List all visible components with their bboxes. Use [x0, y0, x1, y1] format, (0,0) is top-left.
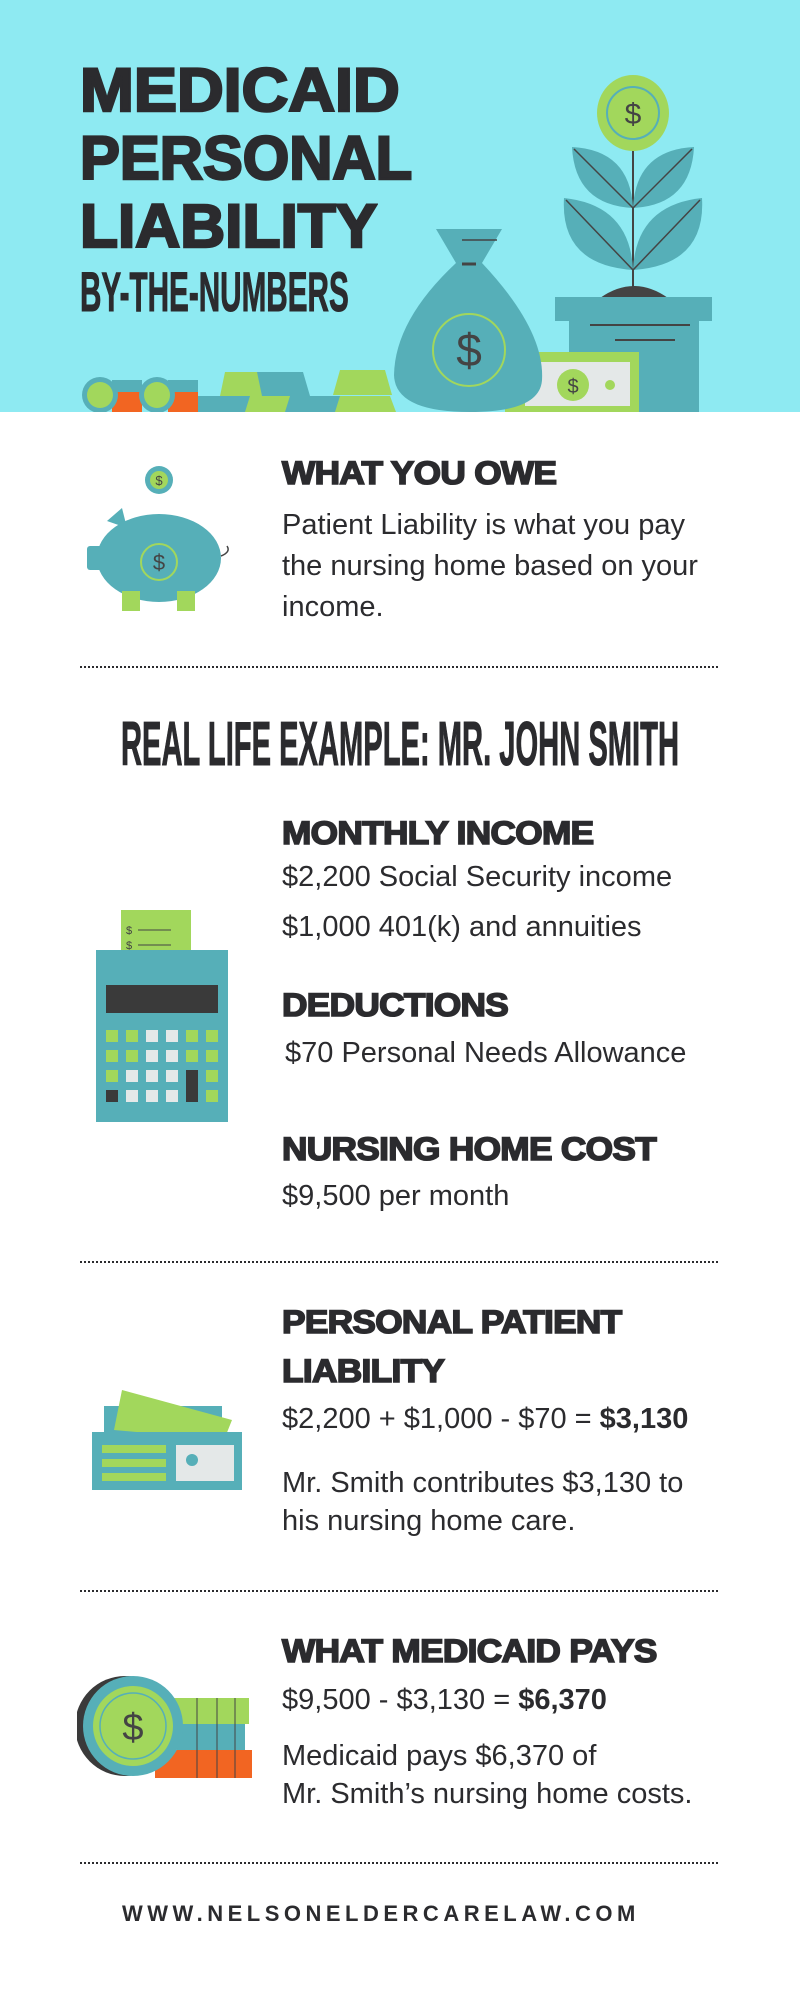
panel: what medicaid pays: [77, 1633, 692, 1810]
footer url: WWW.NELSONELDERCARELAW.COM: [122, 1901, 640, 1926]
text: 401k: $1,000 401(k) and annuities: [282, 911, 642, 943]
icon: plant: $: [625, 98, 642, 131]
heading: personal patient liability: [282, 1304, 623, 1389]
icon: pot: [555, 286, 712, 412]
panel: personal patient liability: [92, 1304, 688, 1537]
heading: monthly income: MONTHLY INCOME: [282, 815, 594, 851]
text: description: income.: [282, 591, 384, 623]
icon: bill: [505, 352, 639, 412]
panel: monthly income and costs: [96, 815, 686, 1212]
subtitle: BY-THE-NUMBERS: [80, 260, 349, 323]
icon: plant: [564, 75, 702, 290]
header banner: [0, 0, 800, 412]
icon: coin stack: $: [122, 1707, 144, 1749]
text: cost: $9,500 per month: [282, 1180, 509, 1212]
icon: piggy bank: [87, 466, 229, 611]
heading: real life example: REAL LIFE EXAMPLE: MR. JOHN SMITH: [121, 710, 679, 779]
text: contribution: Mr. Smith contributes $3,130 to: [282, 1467, 683, 1499]
heading: personal patient liability: LIABILITY: [282, 1353, 444, 1389]
title line 1: MEDICAID: [80, 56, 400, 124]
icon: money bag: [394, 229, 542, 412]
icon: gold bars: [195, 370, 396, 412]
icon: calculator: $: [126, 940, 132, 952]
icon: piggy bank: $: [153, 550, 165, 575]
icon: calculator: [96, 910, 228, 1122]
text: contribution: his nursing home care.: [282, 1505, 575, 1537]
text: social security: $2,200 Social Security income: [282, 861, 672, 893]
title line 3: LIABILITY: [80, 192, 377, 260]
panel: what you owe: [87, 455, 698, 623]
title line 2: PERSONAL: [80, 124, 412, 192]
text: medicaid pays: Medicaid pays $6,370 of: [282, 1740, 596, 1772]
text: description: the nursing home based on your: [282, 550, 698, 582]
heading: nursing home cost: NURSING HOME COST: [282, 1131, 656, 1167]
header illustration: [82, 75, 712, 412]
text: contribution: [282, 1467, 683, 1537]
icon: coins: [82, 377, 198, 413]
icon: piggy bank: $: [155, 473, 163, 488]
heading: what medicaid pays: WHAT MEDICAID PAYS: [282, 1633, 657, 1669]
text: formula: $2,200 + $1,000 - $70 = $3,130: [282, 1403, 688, 1435]
heading: deductions: DEDUCTIONS: [282, 987, 508, 1023]
icon: calculator: $: [126, 925, 132, 937]
heading: what you owe: WHAT YOU OWE: [282, 455, 556, 491]
heading: personal patient liability: PERSONAL PATIENT: [282, 1304, 622, 1340]
text: formula: $9,500 - $3,130 = $6,370: [282, 1684, 607, 1716]
text: personal needs: $70 Personal Needs Allowance: [285, 1037, 686, 1069]
text: description: [282, 509, 698, 623]
icon: coin stack: [77, 1676, 252, 1778]
icon: wallet: [92, 1390, 242, 1490]
text: medicaid pays: Mr. Smith’s nursing home costs.: [282, 1778, 692, 1810]
text: medicaid pays: [282, 1740, 692, 1810]
icon: money bag: $: [456, 324, 482, 376]
text: description: Patient Liability is what you pay: [282, 509, 685, 541]
icon: bill: $: [567, 376, 579, 398]
